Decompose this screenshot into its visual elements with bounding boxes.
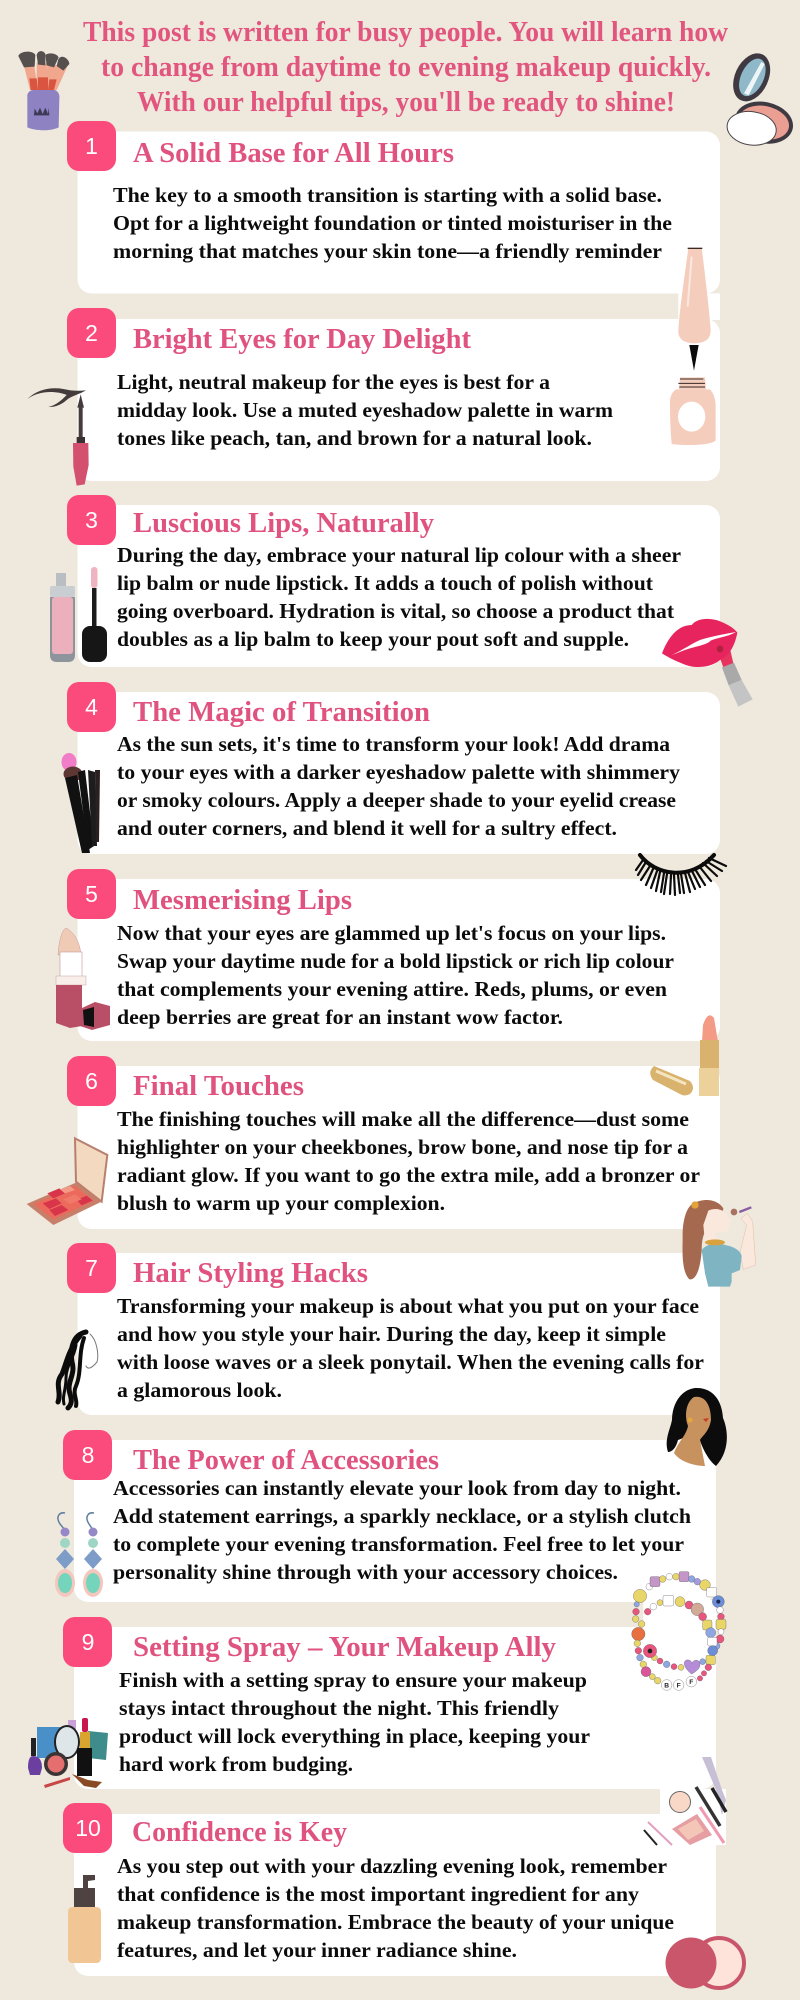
panel: step 3 bbox=[67, 495, 720, 667]
badge 8 bbox=[63, 1430, 112, 1480]
body text 8 bbox=[113, 1476, 691, 1584]
panel: step 6 bbox=[67, 1056, 720, 1229]
icon: cosmetics collection bbox=[28, 1718, 108, 1788]
badge 9: 9 bbox=[82, 1629, 94, 1655]
body text 10: makeup transformation. Embrace the beauty of your unique bbox=[117, 1910, 674, 1934]
body text 6: radiant glow. If you want to go the extra mile, add a bronzer or bbox=[117, 1163, 700, 1187]
intro heading: With our helpful tips, you'll be ready to shine! bbox=[137, 87, 675, 118]
badge 10 bbox=[63, 1803, 112, 1853]
body text 3: lip balm or nude lipstick. It adds a touch of polish without bbox=[117, 571, 654, 595]
panel: step 10 bbox=[63, 1803, 716, 1976]
heading 7: Hair Styling Hacks bbox=[133, 1258, 368, 1289]
panel: step 7 bbox=[67, 1243, 720, 1415]
card 7 background bbox=[78, 1253, 720, 1415]
body text 7: Transforming your makeup is about what you put on your face bbox=[117, 1294, 699, 1318]
card 8 background bbox=[74, 1440, 716, 1602]
body text 5: that complements your evening attire. Reds, plums, or even bbox=[117, 977, 667, 1001]
icon: makeup tools flat lay bbox=[644, 1757, 726, 1845]
heading 9: Setting Spray – Your Makeup Ally bbox=[133, 1632, 556, 1663]
card 3 background bbox=[78, 505, 720, 667]
badge 7 bbox=[67, 1243, 116, 1293]
badge 5: 5 bbox=[85, 881, 98, 907]
body text 4: or smoky colours. Apply a deeper shade to your eyelid crease bbox=[117, 788, 676, 812]
body text 1 bbox=[113, 183, 672, 263]
panel: step 4 bbox=[67, 682, 720, 854]
card 4 background bbox=[78, 692, 720, 854]
body text 7: a glamorous look. bbox=[117, 1378, 282, 1402]
heading 2: Bright Eyes for Day Delight bbox=[133, 324, 472, 355]
icon: beaded friendship bracelets: F bbox=[689, 1679, 693, 1686]
body text 6: blush to warm up your complexion. bbox=[117, 1191, 445, 1215]
icon: blush compact bbox=[666, 1938, 744, 1988]
body text 10: features, and let your inner radiance shine. bbox=[117, 1938, 517, 1962]
body text 10: that confidence is the most important ingredient for any bbox=[117, 1882, 639, 1906]
intro heading: to change from daytime to evening makeup quickly. bbox=[101, 52, 711, 83]
body text 9 bbox=[119, 1668, 590, 1776]
badge 4 bbox=[67, 682, 116, 732]
card 9 background bbox=[74, 1627, 716, 1789]
panel: step 9 bbox=[63, 1617, 716, 1789]
body text 2: Light, neutral makeup for the eyes is best for a bbox=[117, 370, 550, 394]
badge 8: 8 bbox=[82, 1442, 94, 1468]
body text 10: As you step out with your dazzling evening look, remember bbox=[117, 1854, 667, 1878]
intro heading: This post is written for busy people. You will learn how bbox=[83, 17, 729, 48]
body text 8: Add statement earrings, a sparkly necklace, or a stylish clutch bbox=[113, 1504, 691, 1528]
heading 6: Final Touches bbox=[133, 1071, 304, 1102]
body text 6: The finishing touches will make all the difference—dust some bbox=[117, 1107, 689, 1131]
heading 3: Luscious Lips, Naturally bbox=[133, 508, 434, 539]
icon: drop earrings bbox=[55, 1513, 103, 1597]
card 10 background bbox=[74, 1814, 716, 1976]
badge 10: 10 bbox=[75, 1815, 101, 1841]
body text 5: Now that your eyes are glammed up let's focus on your lips. bbox=[117, 921, 666, 945]
panel: step 8 bbox=[63, 1430, 716, 1602]
card 5 background bbox=[78, 879, 720, 1041]
badge 4: 4 bbox=[85, 694, 98, 720]
panel: step 2 bbox=[67, 308, 720, 481]
body text 9: stays intact throughout the night. This friendly bbox=[119, 1696, 559, 1720]
body text 5 bbox=[117, 921, 674, 1029]
body text 6 bbox=[117, 1107, 700, 1215]
badge 3 bbox=[67, 495, 116, 545]
icon: woman with long black hair bbox=[667, 1388, 727, 1466]
icon: lip gloss and wand bbox=[50, 567, 107, 662]
body text 9: hard work from budging. bbox=[119, 1752, 353, 1776]
body text 9: Finish with a setting spray to ensure your makeup bbox=[119, 1668, 587, 1692]
body text 8: Accessories can instantly elevate your look from day to night. bbox=[113, 1476, 681, 1500]
body text 5: Swap your daytime nude for a bold lipstick or rich lip colour bbox=[117, 949, 674, 973]
body text 1: morning that matches your skin tone—a friendly reminder bbox=[113, 239, 662, 263]
badge 2: 2 bbox=[85, 320, 98, 346]
body text 5: deep berries are great for an instant wow factor. bbox=[117, 1005, 563, 1029]
body text 7: with loose waves or a sleek ponytail. When the evening calls for bbox=[117, 1350, 704, 1374]
icon: foundation bottle bbox=[68, 1875, 101, 1963]
heading 10: Confidence is Key bbox=[132, 1817, 347, 1848]
body text 3: During the day, embrace your natural lip colour with a sheer bbox=[117, 543, 681, 567]
panel: step 5 bbox=[67, 869, 720, 1041]
icon: nude lipstick with cap bbox=[56, 928, 110, 1030]
badge 2 bbox=[67, 308, 116, 358]
body text 3 bbox=[117, 543, 681, 651]
panel: step 1 bbox=[67, 121, 720, 294]
body text 8: personality shine through with your accessory choices. bbox=[113, 1560, 618, 1584]
badge 9 bbox=[63, 1617, 112, 1667]
body text 1: The key to a smooth transition is starting with a solid base. bbox=[113, 183, 662, 207]
body text 4: As the sun sets, it's time to transform your look! Add drama bbox=[117, 732, 670, 756]
body text 4: and outer corners, and blend it well for a sultry effect. bbox=[117, 816, 617, 840]
icon: woman applying makeup bbox=[683, 1200, 756, 1287]
icon: lips and lipstick bbox=[662, 619, 753, 707]
card 2 background bbox=[78, 319, 720, 481]
icon: eyelashes bbox=[636, 855, 726, 895]
badge 3: 3 bbox=[85, 507, 98, 533]
heading 4: The Magic of Transition bbox=[133, 697, 430, 728]
icon: eyeliner bottle and cap bbox=[670, 248, 720, 445]
body text 7: and how you style your hair. During the day, keep it simple bbox=[117, 1322, 666, 1346]
heading 8: The Power of Accessories bbox=[133, 1445, 439, 1476]
badge 5 bbox=[67, 869, 116, 919]
body text 2 bbox=[117, 370, 613, 450]
body text 2: midday look. Use a muted eyeshadow palette in warm bbox=[117, 398, 613, 422]
icon: beaded friendship bracelets: F bbox=[677, 1682, 681, 1689]
badge 6 bbox=[67, 1056, 116, 1106]
icon: brush jar bbox=[18, 51, 69, 130]
badge 1 bbox=[67, 121, 116, 171]
icon: compact mirror with puff bbox=[725, 47, 797, 149]
card 1 background bbox=[78, 132, 720, 294]
icon: beaded friendship bracelets: B bbox=[664, 1682, 669, 1689]
icon: eyeliner wand with eye flick bbox=[27, 388, 89, 486]
icon: eyeshadow palette bbox=[27, 1138, 107, 1225]
heading 5: Mesmerising Lips bbox=[133, 885, 352, 916]
badge 1: 1 bbox=[85, 133, 98, 159]
body text 8: to complete your evening transformation. Feel free to let your bbox=[113, 1532, 684, 1556]
card 6 background bbox=[78, 1066, 720, 1229]
icon: beaded friendship bracelets bbox=[632, 1572, 726, 1690]
heading 1: A Solid Base for All Hours bbox=[133, 138, 454, 169]
body text 4 bbox=[117, 732, 680, 840]
body text 4: to your eyes with a darker eyeshadow palette with shimmery bbox=[117, 760, 680, 784]
icon: gold lipstick bbox=[650, 1015, 719, 1096]
body text 3: going overboard. Hydration is vital, so choose a product that bbox=[117, 599, 675, 623]
body text 3: doubles as a lip balm to keep your pout soft and supple. bbox=[117, 627, 629, 651]
body text 7 bbox=[117, 1294, 704, 1402]
body text 10 bbox=[117, 1854, 674, 1962]
body text 9: product will lock everything in place, keeping your bbox=[119, 1724, 590, 1748]
body text 6: highlighter on your cheekbones, brow bone, and nose tip for a bbox=[117, 1135, 688, 1159]
badge 7: 7 bbox=[85, 1255, 98, 1281]
icon: makeup brush set bbox=[62, 753, 100, 853]
body text 2: tones like peach, tan, and brown for a natural look. bbox=[117, 426, 592, 450]
intro heading bbox=[83, 17, 729, 118]
badge 6: 6 bbox=[85, 1068, 98, 1094]
icon: wavy-haired woman sketch bbox=[58, 1332, 98, 1408]
body text 1: Opt for a lightweight foundation or tinted moisturiser in the bbox=[113, 211, 672, 235]
